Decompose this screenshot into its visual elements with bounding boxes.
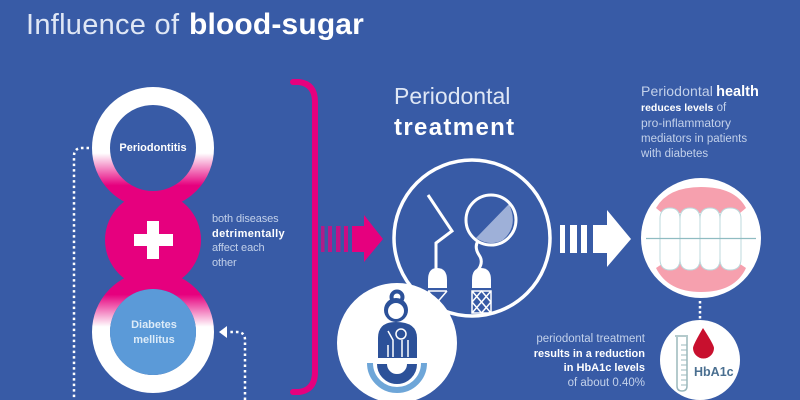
text: both diseases: detrimentally [212, 228, 285, 240]
treatment circle with instruments [394, 160, 550, 316]
text: HbA1c reduction: of about 0.40% [568, 377, 645, 389]
dotted connector [699, 301, 701, 320]
text: periodontal health: with diabetes [641, 148, 708, 160]
text: blood-sugar [189, 8, 364, 41]
label: HbA1c: HbA1c [694, 365, 734, 379]
text: periodontal health: reduces levels of [641, 102, 726, 114]
bracket [293, 82, 315, 392]
title [26, 8, 364, 41]
plus circle [105, 192, 201, 288]
text: both diseases: other [212, 257, 237, 269]
dotted arrow: left loop [74, 148, 89, 400]
text: periodontal health [641, 83, 759, 160]
dotted arrow: right loop [219, 326, 245, 400]
text: HbA1c reduction: results in a reduction [534, 348, 645, 360]
text: both diseases: both diseases [212, 213, 279, 225]
teeth circle [641, 178, 761, 298]
text: periodontal health: mediators in patients [641, 133, 747, 145]
title: Influence of [26, 9, 179, 41]
label: Periodontitis: Periodontitis [119, 142, 187, 154]
text: both diseases: affect each [212, 242, 265, 254]
label: Diabetes mellitus: Diabetes [131, 319, 177, 331]
ring: periodontitis [101, 96, 205, 200]
text: HbA1c reduction [534, 333, 645, 389]
heading: periodontal treatment [394, 83, 516, 141]
pink arrow [321, 215, 383, 262]
ring: diabetes mellitus [101, 280, 205, 384]
white arrow [560, 210, 631, 267]
dentist icon [337, 283, 457, 400]
label: Diabetes mellitus: mellitus [133, 334, 175, 346]
text: HbA1c reduction: periodontal treatment [536, 333, 645, 345]
heading: periodontal treatment: treatment [394, 114, 516, 141]
text: periodontal health: pro-inflammatory [641, 116, 731, 130]
text: HbA1c reduction: in HbA1c levels [564, 362, 645, 374]
text: periodontal health: Periodontal health [641, 83, 759, 100]
heading: periodontal treatment: Periodontal [394, 83, 510, 109]
text: both diseases [212, 213, 285, 269]
label: Diabetes mellitus [131, 319, 177, 346]
HbA1c circle [660, 320, 740, 400]
